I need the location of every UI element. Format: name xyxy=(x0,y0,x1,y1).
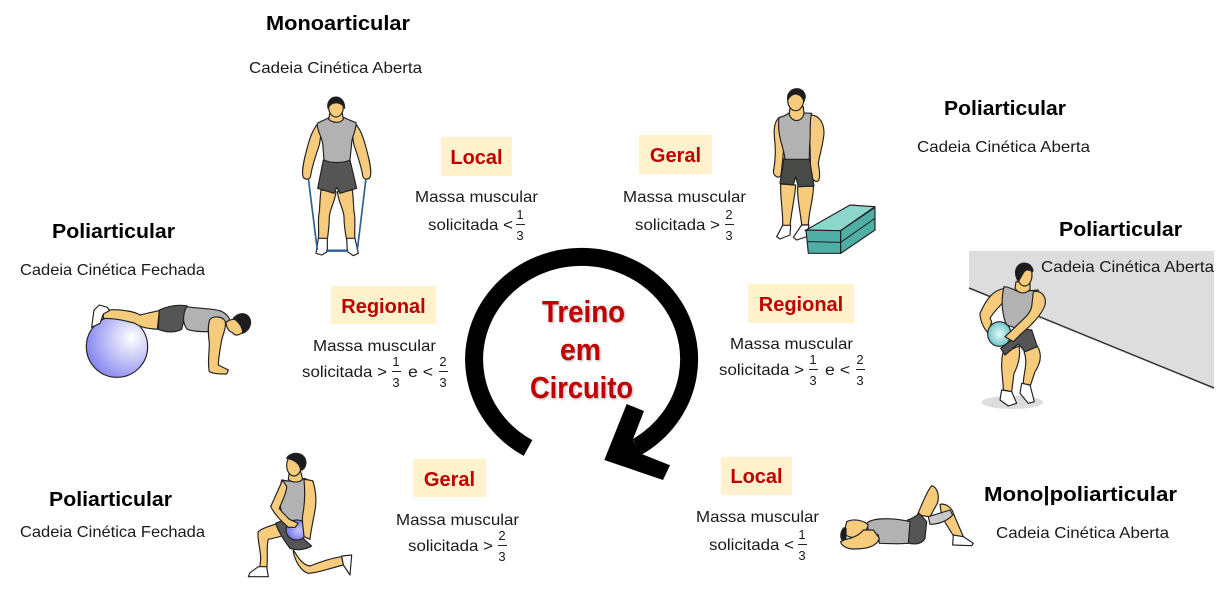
text: massa muscular menor que um terço (top): solicitada < xyxy=(428,217,513,234)
icon: man standing beside step xyxy=(773,89,875,253)
text: massa muscular entre um e dois terços (left): 1 xyxy=(392,354,400,369)
text: massa muscular menor que um terço (top): 3 xyxy=(516,228,524,243)
text: massa muscular entre um e dois terços (right): 1 xyxy=(809,352,817,367)
text: massa muscular menor que um terço (top): 1 xyxy=(516,207,524,222)
text: massa muscular maior que dois terços (bottom): Massa muscular xyxy=(396,512,520,529)
label: Geral (bottom): Geral xyxy=(424,469,475,491)
text: massa muscular entre um e dois terços (right): Massa muscular xyxy=(730,336,854,353)
label: Local (bottom): Local xyxy=(730,466,783,488)
text: massa muscular maior que dois terços (bottom): solicitada > xyxy=(408,538,493,555)
text: massa muscular entre um e dois terços (right) xyxy=(719,336,865,388)
label: Regional (left): Regional xyxy=(341,296,426,318)
text: Cadeia Cinética Fechada (left): Cadeia Cinética Fechada xyxy=(20,262,205,279)
heading: Poliarticular (bottom left): Poliarticular xyxy=(49,489,172,511)
heading: Poliarticular (right): Poliarticular xyxy=(1059,219,1182,241)
heading: Mono|poliarticular: Mono|poliarticular xyxy=(984,484,1177,506)
text: massa muscular entre um e dois terços (left): 3 xyxy=(392,375,400,390)
icon: push-up on exercise ball xyxy=(86,305,251,377)
heading: Poliarticular (top right): Poliarticular xyxy=(944,98,1066,120)
text: massa muscular menor que um terço (bottom) xyxy=(696,509,820,563)
text: massa muscular menor que um terço (top): Massa muscular xyxy=(415,189,539,206)
text: massa muscular entre um e dois terços (left) xyxy=(302,338,448,390)
text: massa muscular maior que dois terços (top) xyxy=(623,189,747,243)
panel: wall background xyxy=(969,251,1214,388)
text: massa muscular entre um e dois terços (right): solicitada > xyxy=(719,362,804,379)
icon: lunge with ball xyxy=(248,453,352,577)
title: Treino em Circuito xyxy=(530,294,633,405)
text: Cadeia Cinética Aberta (top): Cadeia Cinética Aberta xyxy=(249,60,422,77)
label: Geral (top) xyxy=(639,135,712,174)
text: massa muscular entre um e dois terços (left): 3 xyxy=(439,375,447,390)
arrow: circular cycle arrow xyxy=(474,257,689,480)
text: massa muscular maior que dois terços (top): solicitada > xyxy=(635,217,720,234)
label: Local (top): Local xyxy=(450,147,503,169)
icon: man with elastic band xyxy=(303,97,371,256)
text: massa muscular menor que um terço (bottom): 3 xyxy=(798,548,806,563)
text: massa muscular menor que um terço (bottom): solicitada < xyxy=(709,537,794,554)
label: Local (bottom) xyxy=(721,457,792,495)
title: Treino em Circuito: Circuito xyxy=(530,370,633,405)
text: massa muscular maior que dois terços (top): 3 xyxy=(725,228,733,243)
text: massa muscular menor que um terço (bottom): Massa muscular xyxy=(696,509,820,526)
icon: man with ball by the wall xyxy=(980,263,1045,409)
label: Geral (top): Geral xyxy=(650,145,701,167)
text: massa muscular entre um e dois terços (left): e < xyxy=(408,364,433,381)
label: Local (top) xyxy=(441,137,512,176)
text: massa muscular maior que dois terços (bottom) xyxy=(396,512,520,564)
heading: Poliarticular (left): Poliarticular xyxy=(52,221,175,243)
text: massa muscular maior que dois terços (bottom): 3 xyxy=(498,549,506,564)
label: Regional (left) xyxy=(331,286,436,324)
text: Cadeia Cinética Aberta (top right): Cadeia Cinética Aberta xyxy=(917,139,1090,156)
title: Treino em Circuito: em xyxy=(560,332,601,367)
text: massa muscular menor que um terço (bottom): 1 xyxy=(798,527,806,542)
text: massa muscular entre um e dois terços (right): 2 xyxy=(856,352,864,367)
text: massa muscular entre um e dois terços (right): 3 xyxy=(856,373,864,388)
label: Regional (right) xyxy=(748,284,854,323)
text: Cadeia Cinética Fechada (bottom left): Cadeia Cinética Fechada xyxy=(20,524,205,541)
text: massa muscular entre um e dois terços (right): 3 xyxy=(809,373,817,388)
text: massa muscular maior que dois terços (top): 2 xyxy=(725,207,733,222)
label: Geral (bottom) xyxy=(413,459,486,497)
text: massa muscular entre um e dois terços (left): 2 xyxy=(439,354,447,369)
text: massa muscular entre um e dois terços (left): solicitada > xyxy=(302,364,387,381)
icon: man lying on back xyxy=(841,486,973,549)
text: Cadeia Cinética Aberta (right): Cadeia Cinética Aberta xyxy=(1041,259,1214,276)
title: Treino em Circuito: Treino xyxy=(542,294,625,329)
text: massa muscular menor que um terço (top) xyxy=(415,189,539,243)
text: massa muscular entre um e dois terços (right): e < xyxy=(825,362,850,379)
heading: Monoarticular: Monoarticular xyxy=(266,13,410,35)
text: massa muscular maior que dois terços (top): Massa muscular xyxy=(623,189,747,206)
label: Regional (right): Regional xyxy=(759,294,843,316)
text: Cadeia Cinética Aberta (bottom right): Cadeia Cinética Aberta xyxy=(996,525,1169,542)
text: massa muscular maior que dois terços (bottom): 2 xyxy=(498,528,506,543)
text: massa muscular entre um e dois terços (left): Massa muscular xyxy=(313,338,437,355)
